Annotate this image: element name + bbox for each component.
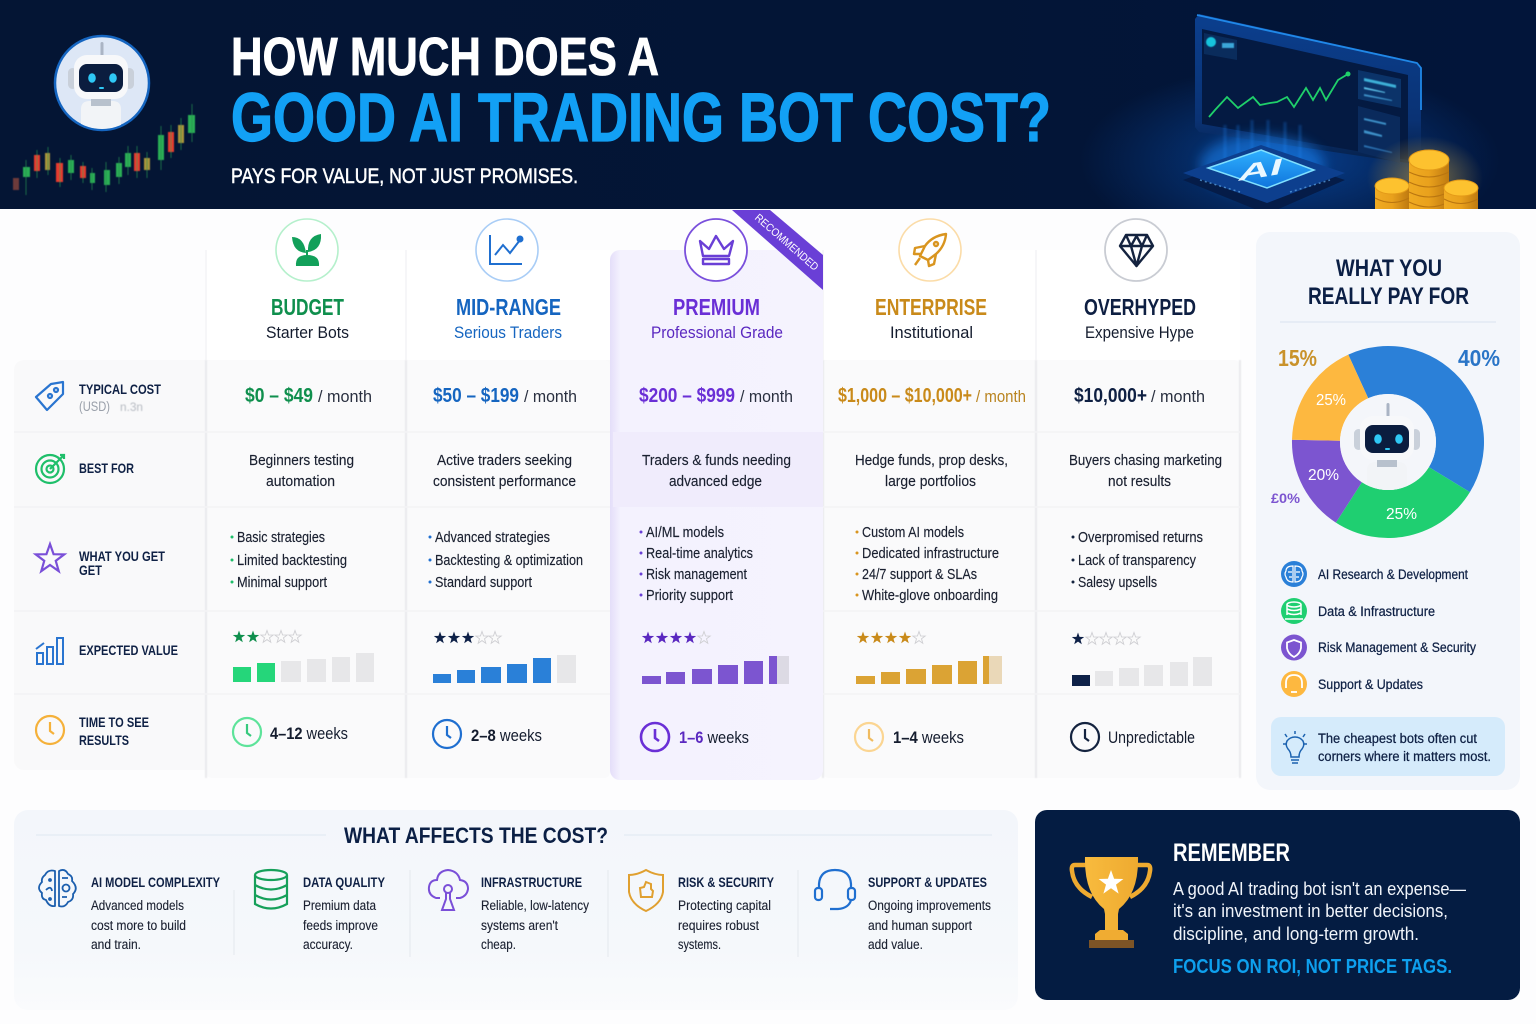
icon: clock [36, 716, 64, 744]
section heading: WHAT AFFECTS THE COST? [344, 823, 608, 848]
comparison table background [14, 250, 1240, 778]
factor: support and updates [815, 870, 991, 952]
features: budget: Minimal support [237, 574, 328, 591]
title [232, 37, 1048, 142]
legend [1281, 561, 1476, 697]
column: mid-range heading [454, 219, 562, 342]
icon: cloud [429, 870, 468, 910]
panel heading [1280, 255, 1496, 322]
best for: mid-range [433, 452, 576, 490]
features: enterprise: Custom AI models [862, 524, 964, 541]
features: premium [640, 524, 753, 604]
typical cost: premium: / month [740, 387, 793, 406]
row label: what you get: WHAT YOU GET [79, 548, 165, 564]
ribbon: recommended: RECOMMENDED [752, 212, 820, 274]
column: premium heading: PREMIUM [673, 294, 760, 320]
icon: light bulb [1283, 731, 1307, 763]
factor: data quality: DATA QUALITY [303, 874, 386, 890]
factor: risk and security: systems. [678, 937, 721, 952]
illustration: AI chip [1183, 135, 1345, 214]
row label: what you get: GET [79, 562, 102, 578]
row label: best for [36, 455, 134, 483]
factor: ai model complexity: and train. [91, 937, 141, 952]
factor: data quality: feeds improve [303, 918, 378, 933]
typical cost: budget: / month [318, 387, 372, 406]
expected value: overhyped stars and bars [1072, 632, 1212, 686]
candlestick chart [13, 104, 195, 195]
features: enterprise: Dedicated infrastructure [862, 545, 999, 562]
expected value: enterprise stars and bars [856, 632, 1002, 684]
time: enterprise: 1–4 weeks [893, 728, 964, 747]
time: overhyped [1071, 723, 1195, 751]
time: budget [233, 718, 348, 746]
header banner [0, 0, 1536, 209]
features: budget [230, 529, 347, 591]
row label: typical cost: n.3n [120, 400, 143, 414]
remember heading: REMEMBER [1173, 839, 1290, 867]
row label: best for: BEST FOR [79, 460, 134, 476]
factor: support and updates: SUPPORT & UPDATES [868, 874, 987, 890]
row label: time to see results [36, 714, 149, 748]
row label: what you get [36, 544, 165, 578]
callout: cheapest bots tip: The cheapest bots often cut [1318, 731, 1477, 746]
callout: cheapest bots tip [1271, 717, 1505, 776]
icon: crown [685, 219, 747, 281]
illustration: trading monitor [1195, 14, 1421, 165]
legend item: support: Support & Updates [1318, 677, 1423, 692]
column: mid-range heading: MID-RANGE [456, 294, 561, 320]
factor: risk and security: Protecting capital [678, 898, 771, 913]
typical cost: enterprise: $1,000 – $10,000+ [838, 385, 972, 407]
legend item: ai research [1281, 561, 1468, 587]
typical cost: overhyped [1074, 385, 1205, 407]
illustration: AI chip: AI [1235, 153, 1286, 186]
icon: trophy [1072, 857, 1150, 948]
features: overhyped: Salesy upsells [1078, 574, 1157, 591]
donut chart [1271, 345, 1500, 538]
expected value: budget stars and bars [233, 630, 374, 682]
row label: typical cost: (USD) [79, 399, 110, 414]
icon: price tag [36, 382, 63, 410]
icon: headset [815, 870, 855, 909]
factor: data quality [255, 870, 386, 952]
panel: what affects the cost [14, 810, 1018, 1010]
time: premium: 1–6 weeks [679, 728, 749, 747]
ribbon: recommended [732, 210, 823, 290]
features: overhyped: Lack of transparency [1078, 552, 1196, 569]
donut chart: 40% [1458, 345, 1500, 371]
column: mid-range heading: Serious Traders [454, 324, 562, 342]
donut chart: 15% [1278, 345, 1317, 371]
expected value: premium stars and bars [642, 632, 789, 684]
icon: diamond [1105, 219, 1167, 281]
column: enterprise heading [875, 219, 987, 342]
remember tagline: FOCUS ON ROI, NOT PRICE TAGS. [1173, 956, 1452, 978]
column: enterprise heading: Institutional [890, 324, 973, 342]
icon: line chart [476, 219, 538, 281]
donut chart: 20% [1308, 467, 1339, 484]
factor: infrastructure [429, 870, 589, 952]
factor: data quality: Premium data [303, 898, 376, 913]
panel: remember [1035, 810, 1520, 1000]
row label: time to see results: TIME TO SEE [79, 714, 149, 730]
factor: ai model complexity: Advanced models [91, 898, 184, 913]
best for: overhyped [1069, 452, 1222, 490]
features: mid-range: Advanced strategies [435, 529, 550, 546]
time: premium [641, 723, 749, 751]
donut chart: 25% [1316, 392, 1346, 409]
typical cost: budget [245, 385, 372, 407]
features: enterprise: 24/7 support & SLAs [862, 566, 977, 583]
column: overhyped heading [1084, 219, 1196, 342]
illustration: coins [1371, 139, 1479, 209]
factor: support and updates: and human support [868, 918, 972, 933]
expected value: mid-range stars and bars [433, 632, 576, 683]
column: budget heading: Starter Bots [266, 324, 349, 342]
best for: budget: Beginners testing [249, 452, 354, 469]
remember body text: it's an investment in better decisions, [1173, 900, 1448, 921]
legend item: support [1281, 671, 1423, 697]
factor: infrastructure: Reliable, low-latency [481, 898, 589, 913]
legend item: risk: Risk Management & Security [1318, 640, 1476, 655]
best for: overhyped: Buyers chasing marketing [1069, 452, 1222, 469]
features: mid-range: Backtesting & optimization [435, 552, 583, 569]
features: mid-range [428, 529, 583, 591]
typical cost: mid-range: / month [524, 387, 577, 406]
features: mid-range: Standard support [435, 574, 533, 591]
typical cost: overhyped: / month [1151, 387, 1205, 406]
typical cost: mid-range: $50 – $199 [433, 385, 519, 407]
callout: cheapest bots tip: corners where it matters most. [1318, 749, 1491, 764]
row label: expected value: EXPECTED VALUE [79, 642, 178, 658]
best for: budget: automation [266, 473, 335, 490]
icon: value bars [36, 638, 63, 664]
time: enterprise [855, 723, 964, 751]
row label: typical cost [36, 381, 161, 414]
factor: infrastructure: INFRASTRUCTURE [481, 874, 582, 890]
best for: premium [642, 452, 791, 490]
best for: mid-range: consistent performance [433, 473, 576, 490]
icon: shield [629, 870, 663, 911]
features: premium: Priority support [646, 587, 734, 604]
row label: time to see results: RESULTS [79, 732, 129, 748]
best for: overhyped: not results [1108, 473, 1171, 490]
factor: ai model complexity [39, 870, 221, 952]
donut chart: 25% [1386, 506, 1417, 523]
title: GOOD AI TRADING BOT COST? [231, 79, 1051, 156]
features: enterprise: White-glove onboarding [862, 587, 998, 604]
legend item: data [1281, 598, 1435, 624]
factor: ai model complexity: AI MODEL COMPLEXITY [91, 874, 221, 890]
legend item: ai research: AI Research & Development [1318, 567, 1468, 582]
best for: mid-range: Active traders seeking [437, 452, 572, 469]
column: premium heading [651, 219, 783, 342]
legend item: risk [1281, 634, 1476, 660]
features: premium: AI/ML models [646, 524, 724, 541]
features: premium: Risk management [646, 566, 748, 583]
remember body text: A good AI trading bot isn't an expense— [1173, 878, 1466, 899]
remember body text [1173, 878, 1466, 944]
column: overhyped heading: Expensive Hype [1085, 324, 1194, 342]
factor: support and updates: Ongoing improvements [868, 898, 991, 913]
factor: data quality: accuracy. [303, 937, 353, 952]
best for: premium: advanced edge [669, 473, 762, 490]
time: overhyped: Unpredictable [1108, 728, 1195, 747]
column: premium heading: Professional Grade [651, 324, 783, 342]
best for: enterprise [855, 452, 1008, 490]
factor: infrastructure: systems aren't [481, 918, 558, 933]
features: enterprise [856, 524, 999, 604]
factor: support and updates: add value. [868, 937, 923, 952]
typical cost: enterprise: / month [976, 387, 1026, 406]
donut chart: £0% [1271, 490, 1301, 506]
column: enterprise heading: ENTERPRISE [875, 294, 987, 320]
typical cost: premium: $200 – $999 [639, 385, 735, 407]
best for: enterprise: Hedge funds, prop desks, [855, 452, 1008, 469]
icon: robot avatar [55, 36, 149, 133]
column: overhyped heading: OVERHYPED [1084, 294, 1196, 320]
factor: risk and security: requires robust [678, 918, 759, 933]
typical cost: overhyped: $10,000+ [1074, 385, 1147, 407]
best for: premium: Traders & funds needing [642, 452, 791, 469]
icon: star [36, 544, 64, 571]
column: budget heading: BUDGET [271, 294, 344, 320]
factor: risk and security [629, 870, 775, 952]
panel heading: WHAT YOU [1336, 255, 1442, 282]
features: budget: Limited backtesting [237, 552, 347, 569]
time: mid-range: 2–8 weeks [471, 726, 542, 745]
features: budget: Basic strategies [237, 529, 325, 546]
legend item: data: Data & Infrastructure [1318, 604, 1435, 619]
best for: enterprise: large portfolios [885, 473, 976, 490]
typical cost: budget: $0 – $49 [245, 385, 313, 407]
icon: rocket [899, 219, 961, 281]
best for: budget [249, 452, 354, 490]
panel heading: REALLY PAY FOR [1308, 283, 1469, 310]
row label: expected value [36, 638, 178, 664]
remember body text: discipline, and long-term growth. [1173, 923, 1419, 944]
time: budget: 4–12 weeks [270, 724, 348, 743]
panel: premium column highlight [610, 250, 823, 780]
features: premium: Real-time analytics [646, 545, 753, 562]
factor: infrastructure: cheap. [481, 937, 516, 952]
time: mid-range [433, 720, 542, 748]
column: budget heading [266, 219, 349, 342]
subtitle: PAYS FOR VALUE, NOT JUST PROMISES. [231, 165, 578, 188]
row label: typical cost: TYPICAL COST [79, 381, 161, 397]
icon: sprout [276, 219, 338, 281]
factor: risk and security: RISK & SECURITY [678, 874, 775, 890]
features: overhyped: Overpromised returns [1078, 529, 1203, 546]
icon: target [36, 455, 64, 483]
icon: database [255, 870, 287, 908]
icon: brain [39, 870, 76, 906]
title: HOW MUCH DOES A [231, 27, 659, 87]
panel: what you really pay for [1256, 232, 1520, 790]
icon: robot in donut [1354, 403, 1420, 494]
features: overhyped [1072, 529, 1203, 591]
typical cost: mid-range [433, 385, 577, 407]
factor: ai model complexity: cost more to build [91, 918, 186, 933]
